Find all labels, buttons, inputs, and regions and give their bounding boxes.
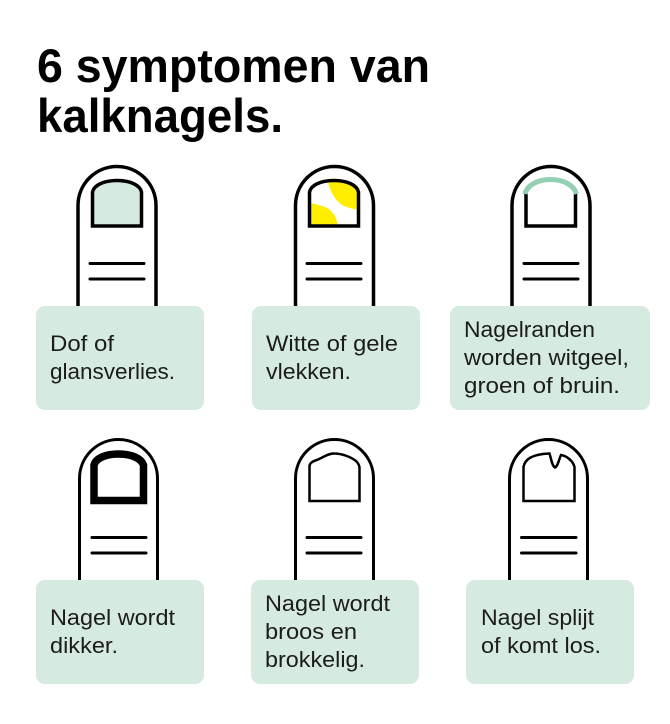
caption card: brokkelig. xyxy=(265,647,365,672)
caption card: of komt los. xyxy=(481,633,601,658)
caption card xyxy=(36,306,204,410)
panel: nagel splijt xyxy=(466,440,634,684)
icon: finger with yellow patches on nail xyxy=(296,166,374,307)
caption card: Nagelranden xyxy=(464,317,595,342)
panel: nagel wordt dikker xyxy=(36,440,204,684)
title xyxy=(37,39,430,142)
caption card: broos en xyxy=(265,619,357,644)
caption card xyxy=(252,306,420,410)
panel: witte of gele vlekken xyxy=(252,166,420,410)
caption card: vlekken. xyxy=(266,359,351,384)
caption card xyxy=(251,580,419,684)
panel: nagelranden verkleurd xyxy=(450,166,650,410)
caption card xyxy=(466,580,634,684)
icon: finger with crumbling nail xyxy=(296,440,374,581)
title: kalknagels. xyxy=(37,89,283,142)
caption card xyxy=(36,580,204,684)
panel: nagel wordt broos xyxy=(251,440,419,684)
caption card: Nagel wordt xyxy=(265,591,390,616)
icon: finger with split nail xyxy=(510,440,588,581)
caption card: worden witgeel, xyxy=(463,345,629,370)
caption card: Witte of gele xyxy=(266,331,398,356)
caption card: Nagel splijt xyxy=(481,605,594,630)
panel: dof of glansverlies xyxy=(36,166,204,410)
caption card: dikker. xyxy=(50,633,118,658)
caption card: Dof of xyxy=(50,331,115,356)
caption card xyxy=(450,306,650,410)
caption card: Nagel wordt xyxy=(50,605,175,630)
title: 6 symptomen van xyxy=(37,39,430,92)
caption card: groen of bruin. xyxy=(464,373,620,398)
icon: finger with thick nail xyxy=(80,440,158,581)
icon: finger with green nail edge xyxy=(512,166,590,307)
icon: finger with dull green nail xyxy=(78,166,156,307)
caption card: glansverlies. xyxy=(50,359,175,384)
